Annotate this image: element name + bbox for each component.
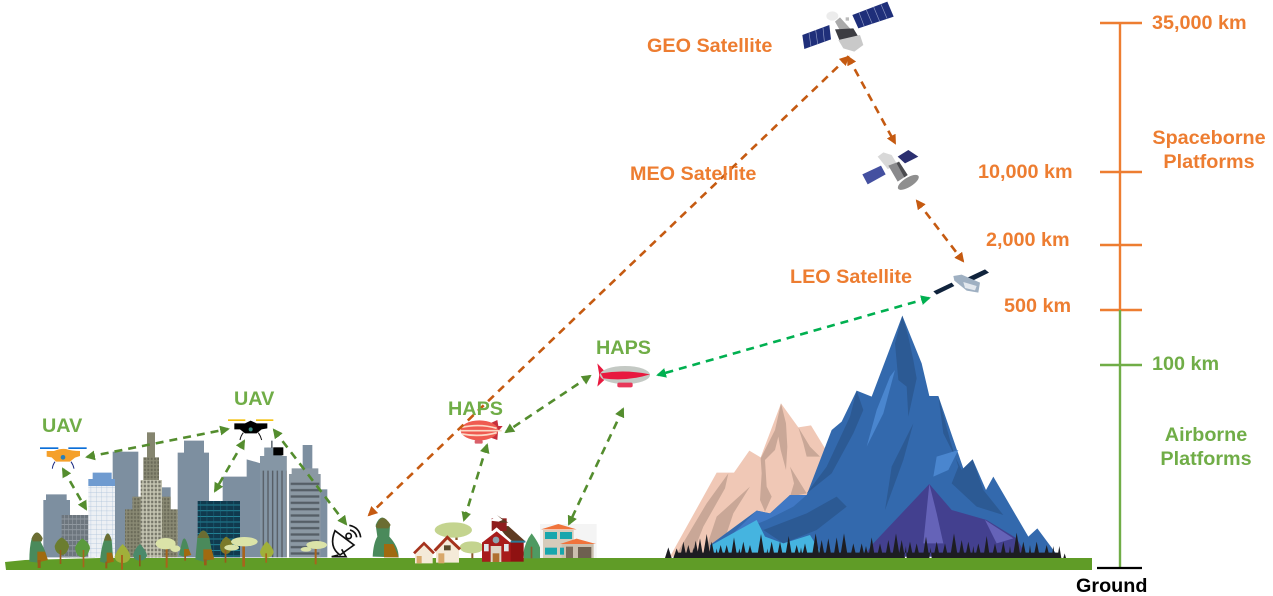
panel: mountains [665, 316, 1066, 558]
icon: LEO satellite [933, 269, 989, 295]
heading: Airborne Platforms: Airborne [1165, 424, 1247, 446]
dark grid building [62, 515, 95, 557]
pink mountain [670, 403, 837, 557]
modern house [540, 524, 597, 558]
small cottages [414, 537, 460, 563]
arrow: upper HAPS to house [569, 409, 623, 524]
arrow: GEO to MEO [848, 57, 895, 143]
icon: red airship, lower HAPS [461, 420, 503, 444]
striped right tower [289, 468, 321, 557]
label: MEO Satellite: MEO Satellite [630, 163, 756, 185]
purple mountain [863, 484, 1027, 557]
label: upper HAPS: HAPS [596, 337, 651, 359]
icon: satellite dish [332, 525, 361, 557]
arrow: MEO to LEO [917, 201, 963, 261]
label: GEO Satellite: GEO Satellite [647, 35, 772, 57]
umbrella trees [156, 537, 327, 568]
teal glass building [198, 501, 240, 557]
icon: MEO satellite [862, 150, 921, 193]
icon: grey and red airship, upper HAPS [597, 363, 650, 387]
label: LEO Satellite: LEO Satellite [790, 266, 912, 288]
trees behind houses [373, 517, 542, 558]
grey background towers [43, 441, 327, 557]
arrow: right UAV to dish [274, 430, 346, 524]
heading: Airborne Platforms: Platforms [1160, 448, 1252, 470]
round trees [55, 537, 274, 570]
conifer tree line [665, 533, 1066, 558]
glass tower [88, 473, 115, 557]
red barn school [479, 515, 526, 562]
label: right UAV: UAV [234, 388, 275, 410]
layered trees [29, 530, 214, 568]
arrow: LEO to HAPS [658, 298, 929, 375]
arrow: HAPS to HAPS [506, 376, 590, 432]
arrow: lower HAPS to school [464, 445, 487, 520]
panel: city skyline [43, 432, 327, 557]
icon: black UAV [228, 419, 273, 440]
altitude scale [1097, 23, 1142, 568]
arrow: left UAV to building [63, 469, 86, 509]
arrow: right UAV to building [215, 441, 244, 491]
stepped tan tower [125, 432, 178, 557]
label: lower HAPS: HAPS [448, 398, 503, 420]
label: 2,000 km: 2,000 km [986, 229, 1070, 251]
label: 35,000 km: 35,000 km [1152, 12, 1247, 34]
panel: city trees [29, 530, 327, 570]
heading: Spaceborne Platforms: Platforms [1163, 151, 1255, 173]
panel: ground strip [5, 558, 1092, 570]
panel: village houses [373, 515, 597, 563]
label: 10,000 km: 10,000 km [978, 161, 1073, 183]
heading: Spaceborne Platforms: Spaceborne [1152, 127, 1266, 149]
label: 100 km: 100 km [1152, 353, 1219, 375]
blue mountain [710, 316, 1058, 557]
arrow: UAV to UAV [87, 429, 228, 457]
light blue foothill [712, 520, 823, 557]
icon: GEO satellite [802, 2, 894, 52]
striped tall tower [260, 441, 287, 557]
arrow: GEO to ground station [369, 57, 848, 515]
icon: orange UAV [40, 447, 87, 469]
label: 500 km: 500 km [1004, 295, 1071, 317]
label: left UAV: UAV [42, 415, 83, 437]
